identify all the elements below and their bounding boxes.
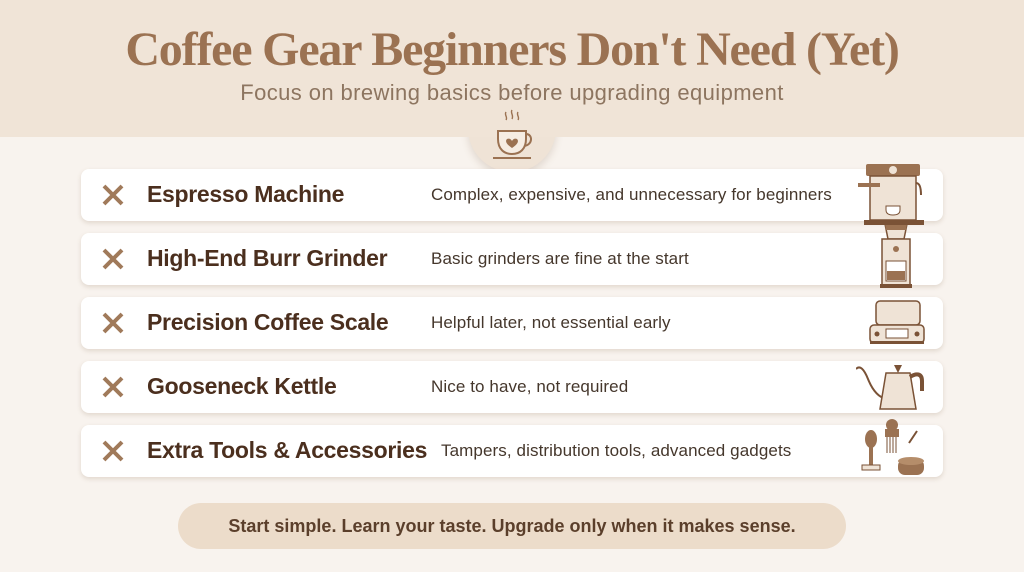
card: scale [81,297,943,349]
title: Coffee Gear Beginners Don't Need (Yet) [125,23,899,76]
icon: espresso machine [858,164,924,225]
subtitle: Focus on brewing basics before upgrading equipment [240,80,784,105]
cup badge circle [468,84,556,172]
icon: x [102,312,124,334]
description: Basic grinders are fine at the start [431,249,689,268]
icon: x [102,440,124,462]
icon: scale [869,300,925,344]
icon: kettle [856,365,924,410]
icon: tools [862,419,924,475]
icon: x [102,376,124,398]
card: espresso machine [81,169,943,221]
name: Gooseneck Kettle [147,373,336,399]
header band [0,0,1024,137]
icon: x [102,184,124,206]
name: Precision Coffee Scale [147,309,388,335]
card: kettle [81,361,943,413]
description: Tampers, distribution tools, advanced gadgets [441,441,791,460]
name: Extra Tools & Accessories [147,437,427,463]
description: Complex, expensive, and unnecessary for beginners [431,185,832,204]
description: Nice to have, not required [431,377,628,396]
bottom callout: Start simple. Learn your taste. Upgrade only when it makes sense. [228,516,796,536]
card: tools [81,425,943,477]
card: grinder [81,233,943,285]
description: Helpful later, not essential early [431,313,671,332]
icon: coffee cup [493,110,532,159]
icon: grinder [880,225,912,288]
name: High-End Burr Grinder [147,245,387,271]
bottom callout [178,503,846,549]
name: Espresso Machine [147,181,344,207]
icon: x [102,248,124,270]
